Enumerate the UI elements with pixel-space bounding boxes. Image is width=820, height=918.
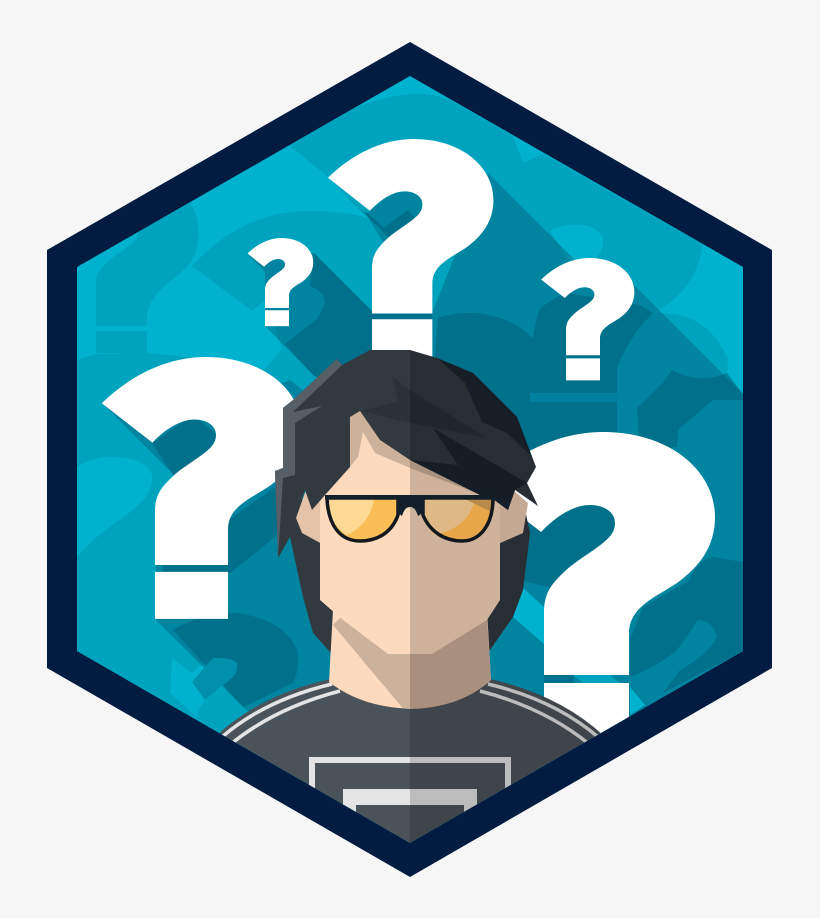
shirt xyxy=(220,679,600,843)
hair dark crown xyxy=(437,358,532,457)
gap band behind right mark xyxy=(544,675,574,683)
mid-tone background shapes xyxy=(77,94,743,780)
shadow: centre question mark xyxy=(432,173,600,697)
hexagon panel xyxy=(60,60,760,860)
shadow: left question mark xyxy=(102,380,340,722)
question mark: large left xyxy=(102,357,302,619)
right lens xyxy=(423,498,493,541)
dark tone: left mark hook xyxy=(152,420,216,476)
panel base colour xyxy=(60,60,760,860)
ears xyxy=(296,492,320,543)
dark tone: lower right xyxy=(630,557,743,693)
neck shadow right xyxy=(410,615,491,709)
person xyxy=(212,350,610,860)
question mark: large right xyxy=(514,432,715,738)
dark tone: right mark hook xyxy=(524,505,615,588)
question mark: small left xyxy=(248,238,313,326)
fringe strand xyxy=(360,376,487,438)
neck xyxy=(329,610,491,709)
back hair xyxy=(285,500,530,652)
question mark: small right xyxy=(541,258,634,380)
shadow: small left question mark xyxy=(247,253,372,378)
hair xyxy=(275,350,538,558)
dark tone: small left shadow xyxy=(285,253,372,377)
glasses frame xyxy=(327,498,493,541)
dark tone: beside left stem xyxy=(163,487,277,573)
glasses top bar and bridge xyxy=(325,495,495,516)
question mark: top centre xyxy=(328,139,493,359)
forehead shadow xyxy=(320,410,410,495)
sunglasses xyxy=(325,495,495,541)
shadow: centre mark hook wedge xyxy=(362,208,414,242)
fringe dark tips xyxy=(410,428,527,510)
shirt emblem xyxy=(309,757,511,788)
long shadows xyxy=(102,173,743,760)
dark tone: behind head right xyxy=(435,294,653,450)
lens tint under hair xyxy=(463,498,492,512)
collar stripes xyxy=(222,684,598,744)
left lens xyxy=(327,498,398,541)
left lens highlight xyxy=(327,498,374,535)
gap band behind centre mark xyxy=(373,314,432,320)
dark tone: upper right band xyxy=(637,370,743,450)
neck shadow left xyxy=(333,615,410,709)
light background details xyxy=(77,224,603,717)
dark tone: below left mark xyxy=(173,613,298,707)
hair highlight xyxy=(275,359,342,558)
face xyxy=(320,420,500,654)
shadow: centre mark hook xyxy=(333,182,422,238)
diagonal accents xyxy=(192,393,645,715)
right lens highlight xyxy=(423,498,475,535)
shadow: upper right question mark xyxy=(600,285,743,740)
